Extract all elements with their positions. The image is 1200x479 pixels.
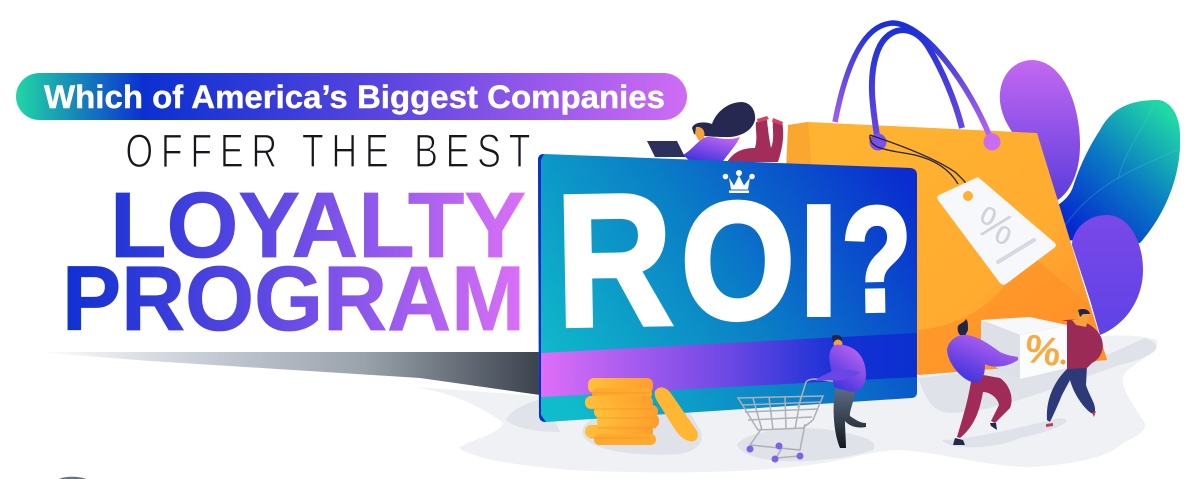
tag percent: % bbox=[969, 196, 1023, 255]
leaf: lower purple bbox=[1072, 215, 1143, 335]
face bbox=[695, 127, 705, 141]
hair bbox=[1078, 309, 1090, 317]
bag body bbox=[788, 122, 1107, 375]
shopping bag bbox=[786, 23, 1107, 375]
title line: loyalty: LOYALTY bbox=[110, 173, 526, 277]
ROI? heading: O bbox=[681, 168, 795, 354]
bag lower highlight shading bbox=[918, 250, 1107, 375]
leaf: teal bbox=[1058, 100, 1180, 243]
price tag bbox=[937, 177, 1056, 285]
tag string bbox=[870, 135, 968, 196]
bottom-left fragment bbox=[59, 477, 86, 479]
loyalty card bbox=[538, 154, 917, 422]
raised legs bbox=[727, 120, 783, 162]
bag side fold bbox=[786, 122, 812, 170]
subtitle: offer the best: OFFER THE BEST bbox=[125, 124, 530, 177]
arm bbox=[816, 370, 860, 381]
coin stack bbox=[585, 378, 698, 445]
ROI? heading bbox=[554, 155, 913, 367]
ROI? heading: ? bbox=[841, 175, 913, 342]
torso bbox=[1062, 320, 1103, 369]
title line: program: PROGRAM bbox=[62, 248, 525, 350]
foot back bbox=[953, 438, 965, 445]
shopping cart bbox=[738, 379, 840, 462]
cart wheels bbox=[746, 442, 804, 462]
handle rivet left bbox=[870, 134, 886, 150]
body bbox=[683, 137, 740, 163]
foot front bbox=[990, 423, 997, 430]
leaf: purple top bbox=[1000, 60, 1080, 200]
top banner pill bbox=[16, 73, 687, 120]
legs bbox=[834, 389, 866, 448]
red trousers bbox=[957, 373, 1012, 438]
coin edges bbox=[590, 393, 656, 438]
handle rivet right bbox=[984, 134, 1000, 150]
neck bbox=[1072, 320, 1088, 327]
shoe front bbox=[1092, 411, 1096, 417]
head bbox=[1078, 310, 1090, 322]
card left rim bbox=[538, 154, 546, 422]
crown icon bbox=[723, 170, 755, 193]
floor shadow bbox=[415, 335, 1157, 472]
ROI? heading: I bbox=[796, 169, 842, 352]
shoe back bbox=[1046, 423, 1053, 427]
box percent: % bbox=[1022, 327, 1064, 375]
feet bbox=[757, 116, 783, 125]
back handle bbox=[835, 23, 992, 142]
woman with laptop bbox=[647, 102, 783, 163]
banner text: Which of America’s Biggest Companies bbox=[44, 79, 665, 115]
leaning coin bbox=[655, 387, 698, 441]
head bbox=[958, 319, 968, 336]
torso and arm bbox=[947, 335, 1018, 383]
ROI? heading: R bbox=[554, 155, 674, 367]
tag line bbox=[998, 240, 1034, 262]
hand bbox=[1060, 360, 1066, 364]
neck bbox=[834, 340, 842, 348]
laptop bbox=[647, 141, 685, 157]
hair bbox=[692, 102, 755, 137]
person carrying left bbox=[947, 319, 1018, 445]
card base bbox=[538, 154, 917, 422]
torso bbox=[829, 345, 866, 392]
front handle bbox=[872, 30, 962, 142]
card stripe bbox=[541, 333, 917, 397]
head bbox=[832, 335, 842, 347]
person carrying right bbox=[1046, 309, 1103, 427]
percent box bbox=[981, 317, 1067, 379]
trousers bbox=[1047, 366, 1095, 422]
person pushing cart bbox=[816, 335, 866, 448]
left shadow wedge bbox=[35, 352, 540, 395]
